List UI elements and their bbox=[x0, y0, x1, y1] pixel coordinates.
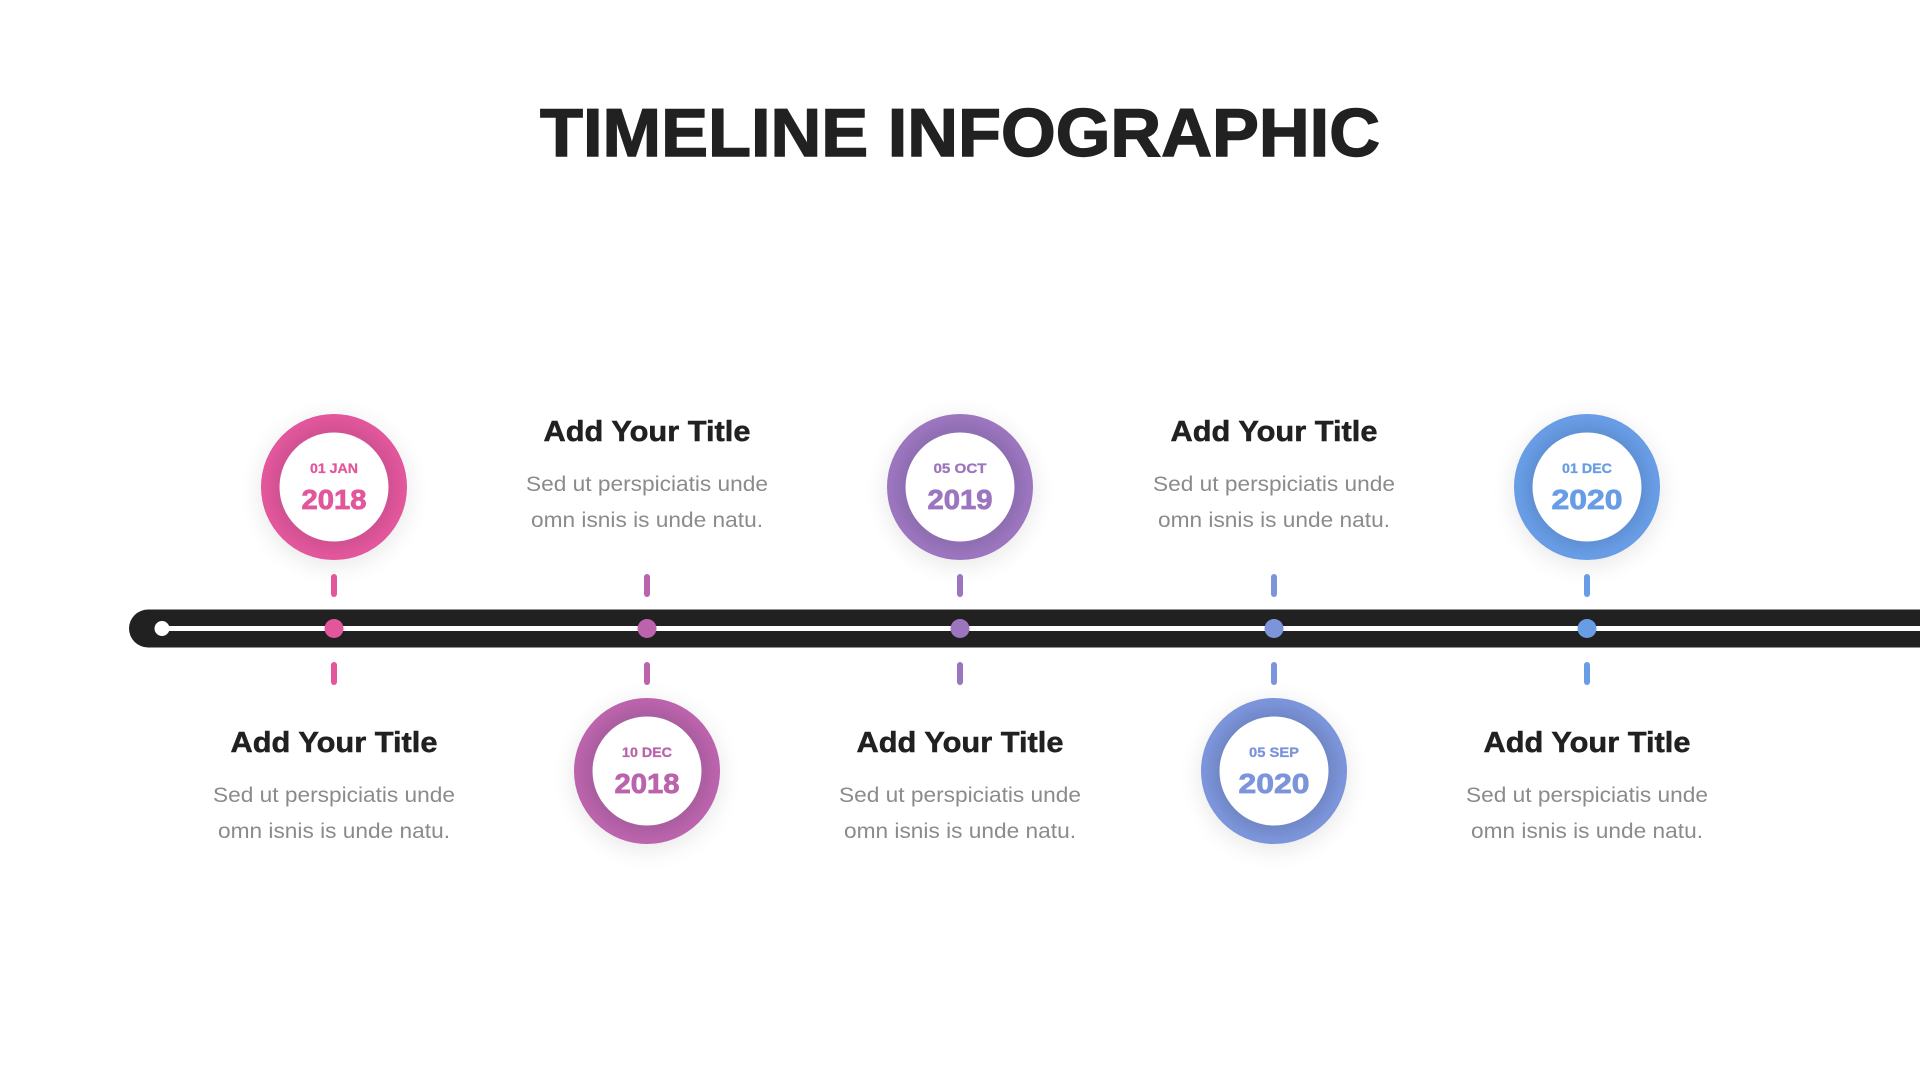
text block: Sed ut perspiciatis unde bbox=[213, 784, 455, 807]
text block: Add Your Title bbox=[230, 727, 438, 759]
text block: omn isnis is unde natu. bbox=[844, 820, 1076, 843]
date badge: 2018 bbox=[302, 484, 366, 515]
date badge: 05 OCT bbox=[934, 460, 987, 476]
date badge bbox=[886, 414, 1034, 566]
date badge: 2020 bbox=[1552, 484, 1622, 515]
milestone 2: 10 Dec 2018 bbox=[526, 416, 768, 850]
text block bbox=[839, 727, 1081, 843]
text block: Sed ut perspiciatis unde bbox=[839, 784, 1081, 807]
connector ticks and dot bbox=[638, 574, 656, 685]
text block bbox=[1153, 416, 1395, 532]
date badge: 01 JAN bbox=[310, 460, 358, 476]
connector ticks and dot bbox=[324, 574, 344, 685]
milestone 5: 01 Dec 2020 bbox=[1466, 414, 1708, 843]
text block: omn isnis is unde natu. bbox=[531, 509, 763, 532]
connector ticks and dot bbox=[950, 574, 970, 685]
connector ticks and dot bbox=[1578, 574, 1596, 685]
milestone 1: 01 Jan 2018 bbox=[213, 414, 455, 843]
date badge bbox=[260, 414, 408, 566]
milestone 3: 05 Oct 2019 bbox=[839, 414, 1081, 843]
date badge bbox=[573, 698, 721, 850]
date badge bbox=[1200, 698, 1348, 850]
text block bbox=[213, 727, 455, 843]
milestone 4: 05 Sep 2020 bbox=[1153, 416, 1395, 850]
text block bbox=[526, 416, 768, 532]
date badge: 2019 bbox=[928, 484, 992, 515]
date badge bbox=[1513, 414, 1661, 566]
date badge: 05 SEP bbox=[1249, 744, 1299, 760]
date badge: 2020 bbox=[1238, 768, 1310, 799]
text block: Sed ut perspiciatis unde bbox=[1466, 784, 1708, 807]
date badge: 2018 bbox=[614, 768, 680, 799]
text block: omn isnis is unde natu. bbox=[1158, 509, 1390, 532]
text block: Sed ut perspiciatis unde bbox=[526, 473, 768, 496]
text block: Sed ut perspiciatis unde bbox=[1153, 473, 1395, 496]
text block: Add Your Title bbox=[856, 727, 1064, 759]
text block: Add Your Title bbox=[544, 416, 750, 448]
title: TIMELINE INFOGRAPHIC bbox=[540, 95, 1380, 171]
text block: Add Your Title bbox=[1484, 727, 1690, 759]
text block: Add Your Title bbox=[1170, 416, 1378, 448]
connector ticks and dot bbox=[1264, 574, 1284, 685]
text block: omn isnis is unde natu. bbox=[1471, 820, 1703, 843]
text block bbox=[1466, 727, 1708, 843]
date badge: 01 DEC bbox=[1562, 460, 1612, 476]
date badge: 10 DEC bbox=[622, 744, 672, 760]
text block: omn isnis is unde natu. bbox=[218, 820, 450, 843]
timeline bar bbox=[129, 610, 1920, 648]
